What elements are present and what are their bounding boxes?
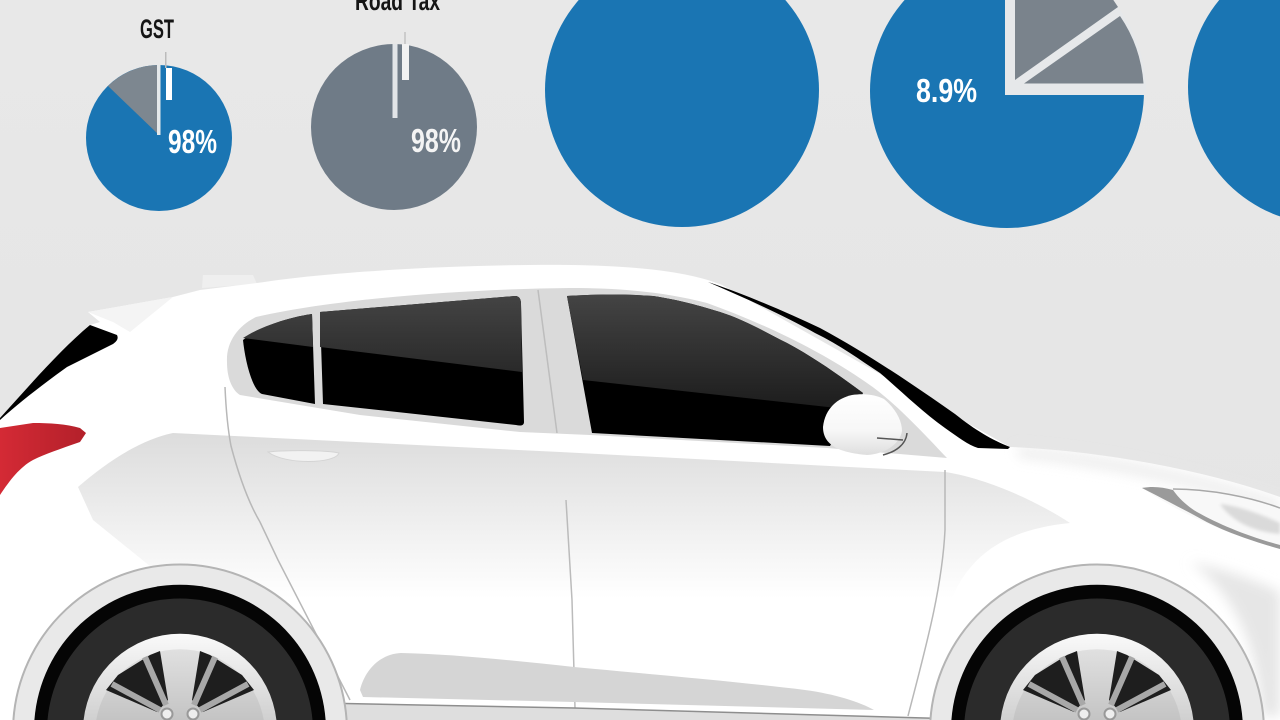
door handle bbox=[268, 451, 339, 462]
pie chart: blue with grey wedges bbox=[868, 0, 1146, 230]
front door line bbox=[908, 470, 945, 716]
window surround bbox=[227, 288, 947, 458]
pie value: 8.9 percent: 8.9% bbox=[916, 72, 977, 109]
pie chart: blue cropped at right edge bbox=[1188, 0, 1280, 224]
roof bump bbox=[202, 275, 257, 288]
rear window bbox=[0, 325, 118, 420]
pie chart: solid blue bbox=[545, 0, 819, 227]
pie value: Road Tax percent: 98% bbox=[411, 122, 461, 159]
front fender shading bbox=[1190, 562, 1280, 716]
sill bbox=[320, 703, 960, 720]
wing mirror bbox=[823, 394, 907, 455]
pie chart: Road Tax bbox=[311, 0, 477, 210]
windshield edge bbox=[708, 282, 1010, 449]
middle window bbox=[320, 296, 524, 426]
pie chart: GST bbox=[86, 14, 232, 211]
front wheel bbox=[930, 565, 1264, 720]
car body bbox=[0, 265, 1280, 720]
heading: GST: GST bbox=[140, 14, 174, 44]
car illustration bbox=[0, 265, 1280, 720]
headlight bbox=[1142, 487, 1280, 549]
window pillar line bbox=[538, 290, 557, 433]
lower door panels bbox=[78, 433, 1070, 720]
front window bbox=[567, 294, 863, 446]
rear door line bbox=[225, 387, 350, 700]
spoiler bbox=[88, 297, 173, 332]
tail light bbox=[0, 423, 86, 495]
rear quarter window bbox=[243, 314, 315, 404]
centre door line bbox=[566, 500, 575, 708]
hood soft edge bbox=[1015, 447, 1280, 512]
rear wheel bbox=[13, 565, 347, 720]
lower body shadow bbox=[360, 653, 874, 710]
pie value: GST percent: 98% bbox=[168, 123, 217, 160]
